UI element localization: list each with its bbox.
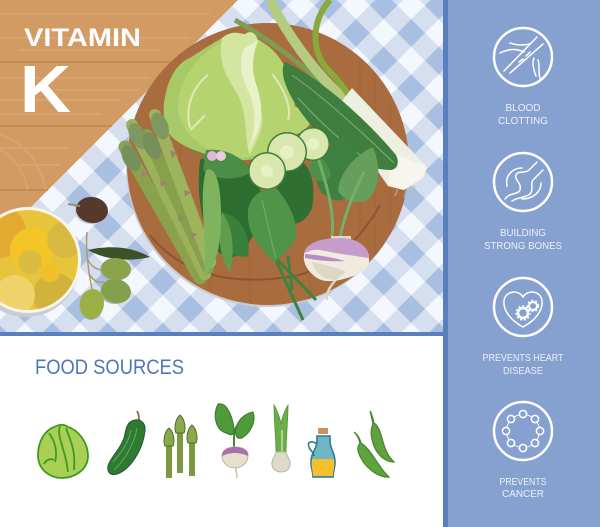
title: vitamin: VITAMIN — [24, 24, 141, 52]
panel: health benefits — [448, 0, 600, 527]
oil bowl — [0, 206, 83, 317]
icon: spring onion — [272, 405, 290, 472]
icon: green beans — [354, 411, 394, 477]
label: cancer: CANCER — [502, 488, 544, 500]
checked tablecloth — [0, 0, 443, 332]
turnip — [304, 236, 369, 300]
olives and leaf — [68, 195, 150, 321]
title: K: K — [20, 52, 71, 127]
label: blood clotting: BLOOD — [506, 102, 541, 114]
icon: strong bones — [494, 153, 552, 211]
label: strong bones: STRONG BONES — [484, 240, 562, 252]
label: prevents heart: PREVENTS HEART — [482, 352, 564, 364]
icon: heart with gears — [494, 278, 552, 336]
icon: cucumber — [108, 411, 145, 475]
wooden table — [0, 0, 238, 238]
icon: blood clotting — [494, 28, 552, 86]
asparagus — [117, 110, 210, 278]
label: clotting: CLOTTING — [498, 115, 548, 127]
cucumber slices — [248, 127, 330, 190]
cutting board — [126, 20, 409, 310]
cabbage — [164, 32, 313, 160]
label: prevents: PREVENTS — [500, 476, 546, 488]
dark spinach leaves — [199, 133, 378, 258]
label: building: BUILDING — [500, 227, 546, 239]
icon: turnip — [215, 404, 254, 478]
heading: food sources: FOOD SOURCES — [35, 356, 184, 379]
green beans and pea flower — [190, 151, 233, 277]
icon: oil bottle — [308, 428, 335, 477]
spring onion — [235, 0, 427, 198]
label: disease: DISEASE — [503, 365, 543, 377]
blue borders — [0, 0, 448, 527]
large spinach leaf — [248, 189, 316, 320]
icon: cabbage — [38, 425, 88, 478]
icon: asparagus — [164, 415, 197, 478]
cucumber — [283, 62, 398, 170]
icon: molecule ring — [494, 402, 552, 460]
